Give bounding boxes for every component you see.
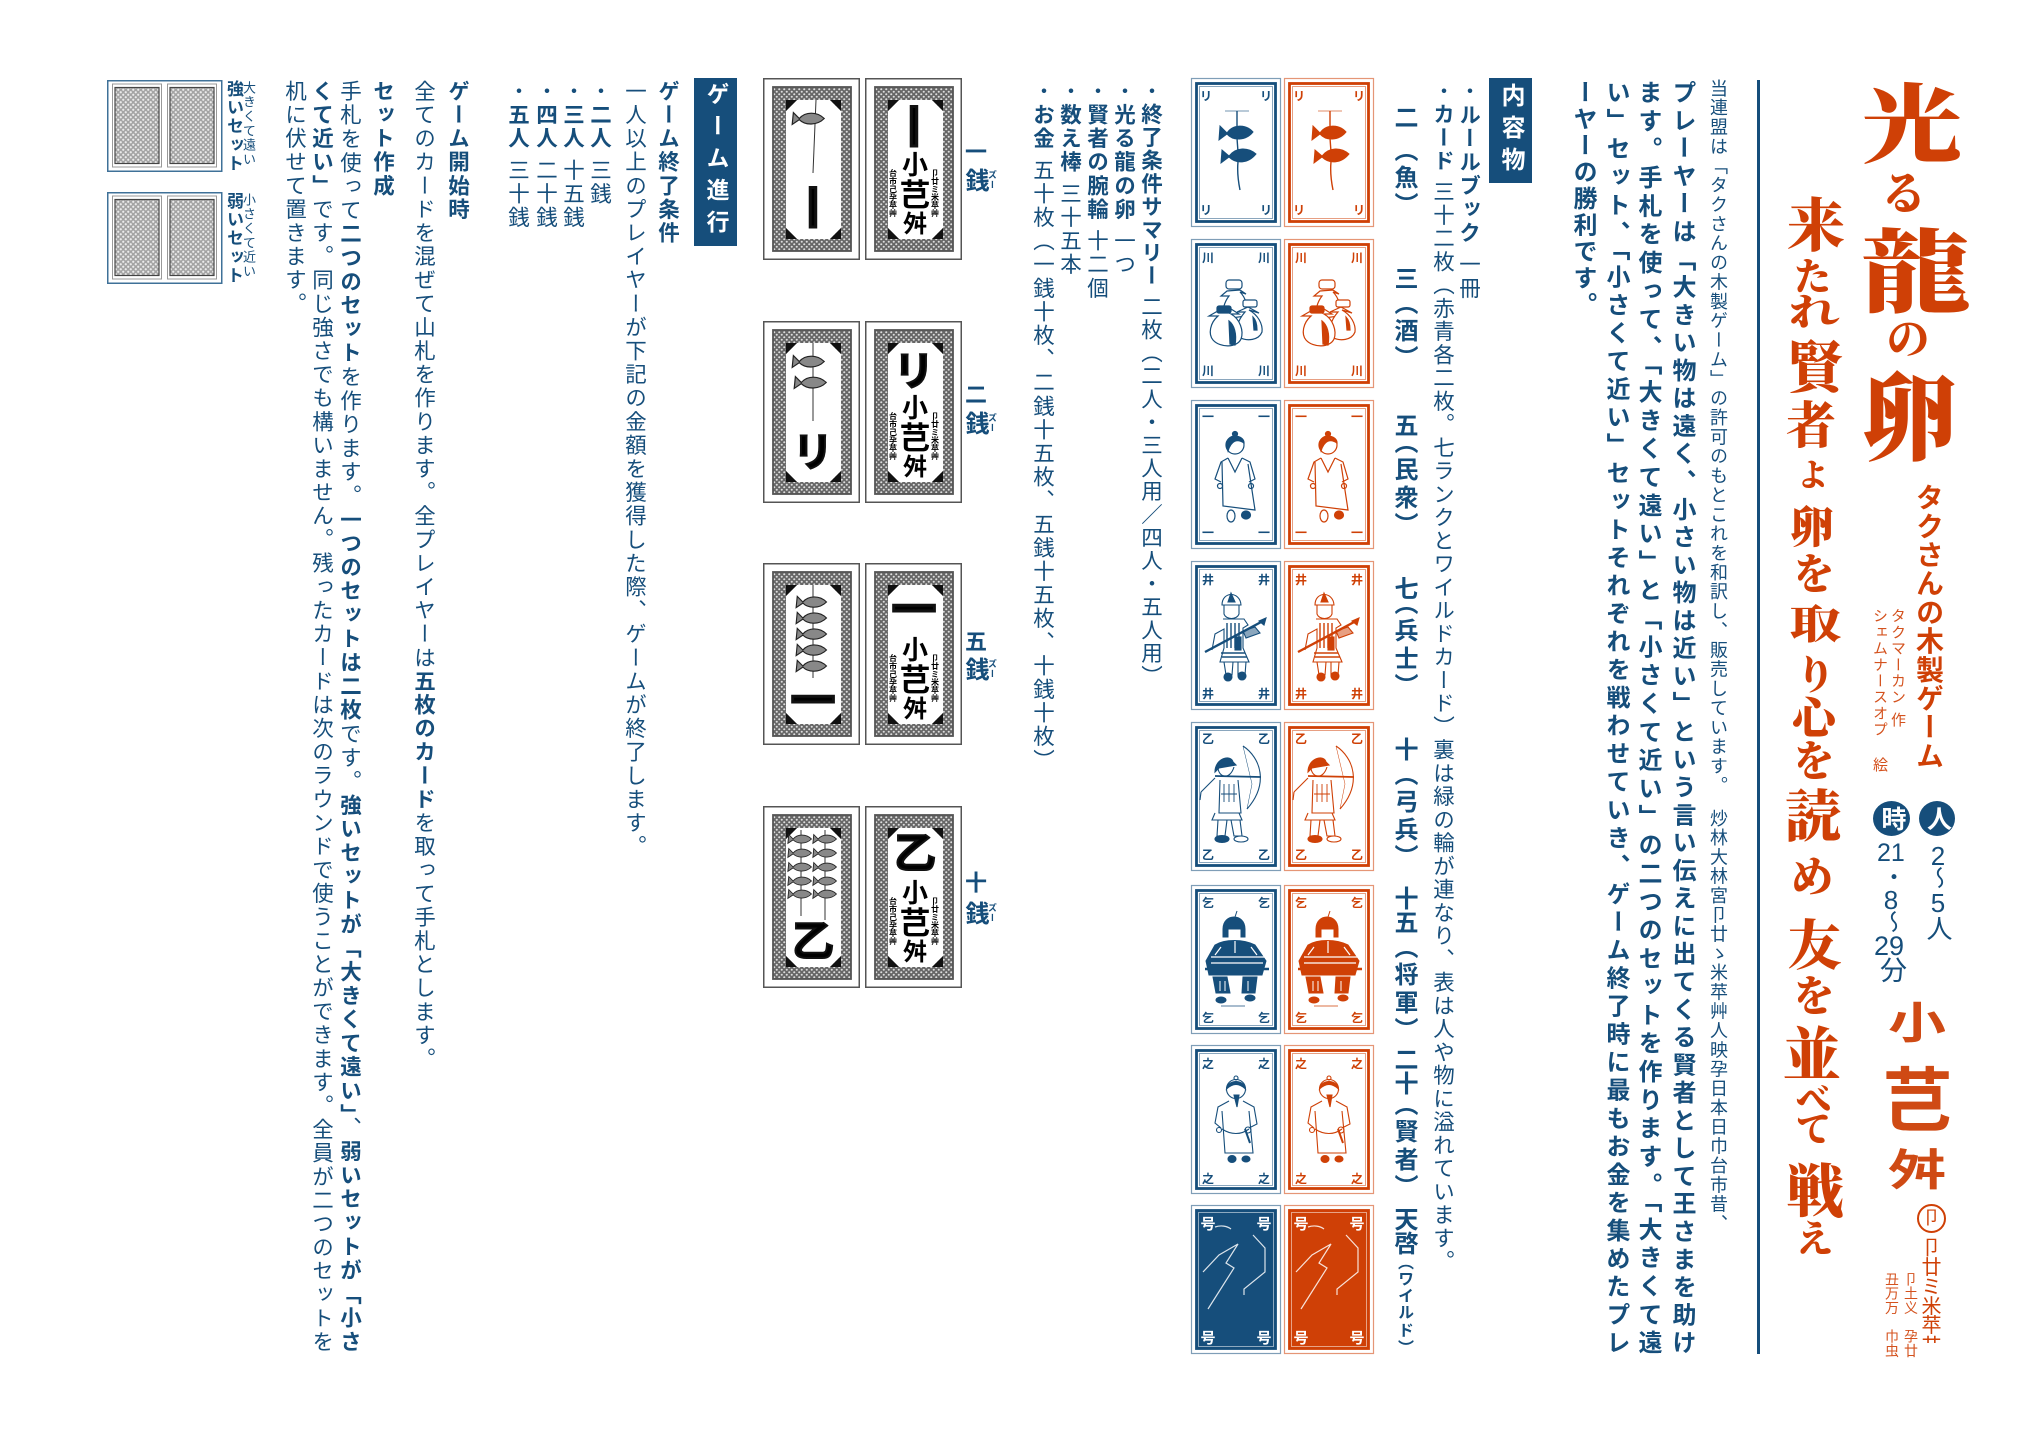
title: 光る龍の卵 (1837, 80, 1995, 464)
card: red wine three: 川 (1295, 364, 1307, 378)
coin ten label: 十 (962, 871, 987, 893)
publisher logo: 舛 (1879, 1147, 1944, 1191)
coin two back: 卩廿ミ米苹艸 (930, 412, 940, 461)
tagline: 来たれ賢者よ 卵を取り心を読め 友を並べて戦え: 戦 (1773, 1161, 1857, 1219)
coin one back: 卩廿ミ米苹艸 (930, 169, 940, 218)
tagline: 来たれ賢者よ 卵を取り心を読め 友を並べて戦え: を (1784, 974, 1844, 1016)
card: red wild tenkei: 号 (1349, 1216, 1365, 1233)
set creation (281, 80, 395, 1354)
licence note: 当連盟は「タクさんの木製ゲーム」の許可のもとこれを和訳し、販売しています。 (1708, 79, 1728, 794)
tagline: 来たれ賢者よ 卵を取り心を読め 友を並べて戦え: め (1780, 854, 1844, 898)
card: red commoner five (1284, 400, 1374, 550)
set creation: 手札を使って 二つのセット を作ります。 一つのセットは二枚 です。 強いセットが「大きくて遠い」 、 弱いセットが「小さ (338, 80, 362, 1352)
coin one label: ズー (987, 170, 997, 190)
icon: players badge and count: 5 (1923, 888, 1953, 918)
tagline: 来たれ賢者よ 卵を取り心を読め 友を並べて戦え: 並 (1770, 1024, 1854, 1082)
tagline: 来たれ賢者よ 卵を取り心を読め 友を並べて戦え: を (1784, 739, 1844, 781)
weak set example: 小さくて近い (241, 193, 256, 279)
card rank labels: 三 （酒） (1390, 266, 1417, 362)
set creation: くて近い」 です。同じ強さでも構いません。残ったカードは次のラウンドで使うことができます。全員が二つのセットを (310, 80, 334, 1352)
card: red general fifteen (1284, 884, 1374, 1034)
card: blue archer ten: 乙 (1258, 732, 1270, 746)
card: red commoner five: 一 (1295, 526, 1307, 540)
title: 光る龍の卵: 卵 (1841, 368, 1978, 464)
coin five label: 銭 (961, 657, 988, 681)
icon: players badge and count: 人 (1924, 806, 1952, 831)
coin five back: 小 (902, 635, 928, 665)
card: blue commoner five: 一 (1258, 526, 1270, 540)
card rank labels: 十 （弓兵） (1390, 737, 1417, 861)
component list: ・ 数え棒 三十五本 (1058, 80, 1082, 277)
component list: ・ 終了条件サマリー 二枚（二人・三人用／四人・五人用） (1138, 80, 1162, 688)
card: red wine three: 川 (1351, 364, 1363, 378)
coin one back: 台市己孕苹艸 (888, 168, 898, 218)
card: red wild tenkei (1284, 1204, 1374, 1354)
component list (1030, 80, 1162, 772)
publisher logo: 小 (1879, 1000, 1944, 1044)
publisher mark and address in pseudo script (1884, 1204, 1946, 1358)
card: red wine three (1284, 238, 1374, 388)
component list: ・ 光る龍の卵 一つ (1112, 80, 1136, 277)
intro paragraph: ーヤーの勝利です。 (1569, 80, 1596, 318)
card: red sage twenty: 之 (1295, 1171, 1307, 1186)
card: blue soldier seven: 井 (1202, 686, 1214, 701)
card: blue sage twenty: 之 (1202, 1171, 1214, 1186)
coin five label: ズー (987, 659, 997, 679)
card: blue general fifteen (1190, 884, 1282, 1034)
coin ten front: 乙 (792, 918, 834, 965)
coin ten back (865, 806, 962, 988)
credits: designer and artist: シェムナースオプ (1871, 608, 1888, 738)
publisher logo (1873, 1000, 1951, 1191)
card: blue wild tenkei (1190, 1204, 1282, 1354)
coin ten label: 銭 (961, 901, 988, 925)
card: blue wild tenkei: 号 (1200, 1330, 1216, 1347)
tagline: 来たれ賢者よ 卵を取り心を読め 友を並べて戦え: を (1784, 552, 1844, 594)
coin one back: 小 (902, 150, 928, 180)
card: red archer ten: 乙 (1351, 848, 1363, 862)
card rank labels: 天啓 （ワイルド） (1390, 1207, 1417, 1350)
tagline: 来たれ賢者よ 卵を取り心を読め 友を並べて戦え: 卵 (1780, 504, 1844, 548)
card: blue archer ten: 乙 (1258, 848, 1270, 862)
icon: players badge and count: 人 (1923, 915, 1953, 941)
card: blue wine three: 川 (1202, 364, 1214, 378)
card: blue soldier seven: 井 (1202, 572, 1214, 587)
coin ten back: 舛 (903, 939, 927, 966)
set creation: 机に伏せて置きます。 (282, 80, 306, 316)
tagline: 来たれ賢者よ 卵を取り心を読め 友を並べて戦え: 来 (1774, 195, 1858, 253)
game end conditions: 一人以上のプレイヤーが下記の金額を獲得した際、ゲームが終了します。 (622, 80, 646, 859)
coin two back: 台市己孕苹艸 (888, 411, 898, 461)
icon: time badge and duration: 21 (1877, 839, 1905, 867)
heading: ゲーム進行 (694, 78, 737, 246)
icon: time badge and duration (1873, 801, 1910, 983)
card: blue fish two: リ (1200, 203, 1212, 217)
coin one front (763, 78, 860, 260)
tagline: 来たれ賢者よ 卵を取り心を読め 友を並べて戦え: て (1788, 1110, 1839, 1146)
game start (410, 80, 470, 1060)
intro paragraph (1569, 80, 1696, 1354)
strong set example: 強いセット (224, 80, 243, 173)
strong set example: 大きくて遠い (241, 81, 256, 167)
card: red wild tenkei: 号 (1349, 1330, 1365, 1347)
icon: time badge and duration: ・ (1879, 865, 1905, 888)
coin one back: 舛 (903, 211, 927, 238)
licence note (1708, 79, 1728, 1232)
set creation: セット作成 (370, 80, 394, 198)
weak set example (107, 192, 257, 285)
coin one label: 銭 (961, 168, 988, 192)
card: blue general fifteen: 乞 (1202, 1010, 1214, 1025)
card: blue soldier seven: 井 (1258, 572, 1270, 587)
contents list: rulebook and cards (1430, 80, 1480, 1273)
coin one back (865, 78, 962, 260)
game end conditions: ・ 三人 十五銭 (560, 80, 584, 230)
coin two back (865, 321, 962, 503)
publisher mark and address in pseudo script: 丑万万 巾虫 (1884, 1272, 1900, 1358)
card: red archer ten (1284, 722, 1374, 872)
card: blue archer ten: 乙 (1202, 848, 1214, 862)
card: blue archer ten (1190, 722, 1282, 872)
coin five back: 芑 (900, 663, 930, 698)
coin one back: 芑 (900, 178, 930, 213)
coin ten back: 卩廿ミ米苹艸 (930, 897, 940, 946)
card: blue fish two: リ (1200, 89, 1212, 103)
icon: players badge and count: ～ (1925, 866, 1951, 889)
icon: time badge and duration: 8 (1876, 885, 1906, 915)
game end conditions: ・ 四人 二十銭 (534, 80, 558, 230)
coin ten back: 小 (902, 878, 928, 908)
panel: rank card grid (1190, 78, 1374, 1354)
card: red general fifteen: 乞 (1351, 895, 1363, 910)
card: blue general fifteen: 乞 (1258, 895, 1270, 910)
intro paragraph: ます。手札を使って、「大きくて遠い」と「小さくて近い」の二つのセットを作ります。「大きくて遠 (1634, 80, 1661, 1354)
card: blue fish two (1190, 78, 1282, 228)
coin ten back: 乙 (894, 830, 936, 877)
coin five back: 台市己孕苹艸 (888, 653, 898, 703)
card: blue sage twenty: 之 (1202, 1056, 1214, 1071)
coin one label: 一 (962, 140, 987, 162)
game end conditions: ゲーム終了条件 (656, 80, 680, 245)
card: red general fifteen: 乞 (1295, 895, 1307, 910)
card: blue general fifteen: 乞 (1202, 895, 1214, 910)
card: red sage twenty: 之 (1351, 1171, 1363, 1186)
card: blue wine three: 川 (1202, 251, 1214, 265)
card: red soldier seven (1284, 560, 1374, 710)
credits: designer and artist (1871, 608, 1906, 772)
card: red soldier seven: 井 (1295, 572, 1307, 587)
card: red general fifteen: 乞 (1295, 1010, 1307, 1025)
card: red archer ten: 乙 (1351, 732, 1363, 746)
tagline: 来たれ賢者よ 卵を取り心を読め 友を並べて戦え: 友 (1776, 917, 1853, 971)
coin five back: 舛 (903, 696, 927, 723)
intro paragraph: プレーヤーは「大きい物は遠く、小さい物は近い」という言い伝えに出てくる賢者として王さまを助け (1668, 80, 1695, 1354)
heading: 内容物: 内容物 (1497, 82, 1524, 178)
card rank labels (1390, 105, 1418, 1350)
component list: ・ お金 五十枚（一銭十枚、二銭十五枚、五銭十五枚、十銭十枚） (1030, 80, 1054, 772)
card: red fish two (1284, 78, 1374, 228)
coin five label: 五 (962, 630, 987, 652)
card: blue sage twenty: 之 (1258, 1056, 1270, 1071)
card: red wine three: 川 (1295, 251, 1307, 265)
coin one back: 丨 (893, 104, 935, 151)
card: red sage twenty (1284, 1044, 1374, 1194)
publisher mark and address in pseudo script: 卩土义 孕廿 (1903, 1272, 1919, 1358)
title: 光る龍の卵: 光 (1840, 80, 1984, 166)
game start: 全てのカードを混ぜて山札を作ります。全プレイヤーは 五枚のカード を取って手札とします。 (412, 80, 436, 1071)
coin five front (763, 563, 860, 745)
coin two label: ズー (987, 413, 997, 433)
card rank labels: 七 （兵士） (1390, 576, 1417, 690)
card rank labels: 二十 （賢者） (1390, 1047, 1417, 1191)
card: red archer ten: 乙 (1295, 732, 1307, 746)
card: blue archer ten: 乙 (1202, 732, 1214, 746)
title: 光る龍の卵: る (1871, 169, 1937, 215)
tagline: 来たれ賢者よ 卵を取り心を読め 友を並べて戦え: べ (1788, 1080, 1839, 1116)
tagline: 来たれ賢者よ 卵を取り心を読め 友を並べて戦え: た (1785, 257, 1840, 295)
card: blue wine three: 川 (1258, 364, 1270, 378)
weak set example: 弱いセット (224, 192, 243, 285)
icon: time badge and duration: ～ (1879, 910, 1905, 933)
coin five back: 卩廿ミ米苹艸 (930, 654, 940, 703)
coin two back: 小 (902, 393, 928, 423)
intro paragraph: い」セット、「小さくて近い」セットそれぞれを戦わせていき、ゲーム終了時に最もお金を集めたプレ (1602, 80, 1629, 1354)
card: blue wild tenkei: 号 (1256, 1330, 1272, 1347)
card: red sage twenty: 之 (1295, 1056, 1307, 1071)
tagline: 来たれ賢者よ 卵を取り心を読め 友を並べて戦え: よ (1790, 458, 1836, 490)
card: red archer ten: 乙 (1295, 848, 1307, 862)
coin five back (865, 563, 962, 745)
icon: time badge and duration: 分 (1876, 956, 1906, 983)
coin one front: 丨 (792, 185, 834, 232)
card: red soldier seven: 井 (1351, 686, 1363, 701)
card: blue commoner five: 一 (1202, 410, 1214, 424)
coin ten label: ズー (987, 903, 997, 923)
card: red fish two: リ (1353, 203, 1365, 217)
tagline: 来たれ賢者よ 卵を取り心を読め 友を並べて戦え: 取 (1778, 603, 1853, 643)
tagline: 来たれ賢者よ 卵を取り心を読め 友を並べて戦え: 賢 (1775, 338, 1855, 394)
card: blue commoner five: 一 (1258, 410, 1270, 424)
coin one label (961, 140, 997, 192)
coin five label (961, 630, 997, 681)
coin ten back: 台市己孕苹艸 (888, 896, 898, 946)
card: red fish two: リ (1353, 89, 1365, 103)
card: blue wild tenkei: 号 (1200, 1216, 1216, 1233)
game end conditions (504, 80, 682, 850)
tagline: 来たれ賢者よ 卵を取り心を読め 友を並べて戦え: り (1787, 654, 1844, 694)
coin five front: 一 (791, 677, 835, 726)
card rank labels: 二 （魚） (1390, 105, 1417, 209)
game end conditions: ・ 二人 三銭 (588, 80, 612, 206)
game end conditions: ・ 五人 三十銭 (506, 80, 530, 230)
card: blue general fifteen: 乞 (1258, 1010, 1270, 1025)
card: red general fifteen: 乞 (1351, 1010, 1363, 1025)
coin two back: 舛 (903, 454, 927, 481)
card: blue wild tenkei: 号 (1256, 1216, 1272, 1233)
card: red soldier seven: 井 (1295, 686, 1307, 701)
card: blue commoner five: 一 (1202, 526, 1214, 540)
contents list: rulebook and cards: ・ ルールブック 一冊 (1456, 80, 1480, 300)
coin ten back: 芑 (900, 906, 930, 941)
coin two front (763, 321, 860, 503)
card: red wine three: 川 (1351, 251, 1363, 265)
title: 光る龍の卵: の (1876, 316, 1940, 360)
tagline: 来たれ賢者よ 卵を取り心を読め 友を並べて戦え (1770, 195, 1858, 1257)
heading: ゲーム進行: ゲーム進行 (703, 82, 729, 242)
publisher mark and address in pseudo script: 卩 (1922, 1208, 1940, 1228)
coin two back: リ (894, 350, 934, 394)
strong set example (107, 80, 257, 173)
title: 光る龍の卵: 龍 (1837, 225, 1995, 315)
card: red wild tenkei: 号 (1293, 1216, 1309, 1233)
panel: coin cards (763, 78, 997, 988)
publisher mark and address in pseudo script: 卩廿ミ米苹艹 (1918, 1237, 1940, 1353)
icon: time badge and duration: 29 (1874, 931, 1904, 961)
card: blue soldier seven (1190, 560, 1282, 710)
tagline: 来たれ賢者よ 卵を取り心を読め 友を並べて戦え: 心 (1782, 695, 1846, 739)
game start: ゲーム開始時 (446, 80, 470, 222)
card: blue commoner five (1190, 400, 1282, 550)
credits: designer and artist: 絵 (1871, 757, 1888, 772)
card: blue fish two: リ (1260, 203, 1272, 217)
coin two front: リ (793, 431, 833, 475)
card: red fish two: リ (1293, 203, 1305, 217)
card: red commoner five: 一 (1351, 526, 1363, 540)
card: red fish two: リ (1293, 89, 1305, 103)
card rank labels: 十五 （将軍） (1390, 886, 1417, 1034)
card: red wild tenkei: 号 (1293, 1330, 1309, 1347)
card: red commoner five: 一 (1295, 410, 1307, 424)
icon: players badge and count: 2 (1923, 841, 1953, 871)
component list: ・ 賢者の腕輪 十二個 (1084, 80, 1108, 300)
credits: designer and artist: 作 (1889, 712, 1906, 727)
card: blue wine three (1190, 238, 1282, 388)
tagline: 来たれ賢者よ 卵を取り心を読め 友を並べて戦え: れ (1777, 293, 1852, 329)
card: red sage twenty: 之 (1351, 1056, 1363, 1071)
coin two label: 銭 (961, 411, 988, 435)
card: blue sage twenty (1190, 1044, 1282, 1194)
coin ten label (962, 871, 994, 927)
card: red soldier seven: 井 (1351, 572, 1363, 587)
card: blue sage twenty: 之 (1258, 1171, 1270, 1186)
coin two back: 芑 (900, 421, 930, 456)
card: blue wine three: 川 (1258, 251, 1270, 265)
licence note: 炒林大林宮卩廿ゝ米苹艸人映孕日本日巾台市昔、 (1708, 809, 1728, 1232)
subtitle: タクさんの木製ゲーム: タクさんの木製ゲーム (1913, 483, 1944, 770)
coin two label (961, 383, 997, 435)
coin two label: 二 (962, 383, 987, 405)
coin ten front (763, 806, 860, 988)
icon: players badge and count (1919, 801, 1955, 941)
credits: designer and artist: タクマーカン (1889, 608, 1906, 705)
tagline: 来たれ賢者よ 卵を取り心を読め 友を並べて戦え: 読 (1773, 787, 1853, 843)
tagline: 来たれ賢者よ 卵を取り心を読め 友を並べて戦え: 者 (1775, 399, 1847, 449)
card: blue fish two: リ (1260, 89, 1272, 103)
card: blue soldier seven: 井 (1258, 686, 1270, 701)
publisher logo: 芑 (1873, 1064, 1951, 1134)
heading: 内容物 (1489, 78, 1532, 183)
vertical divider line (1757, 80, 1760, 1354)
card: red commoner five: 一 (1351, 410, 1363, 424)
coin five back: 一 (892, 586, 936, 635)
tagline: 来たれ賢者よ 卵を取り心を読め 友を並べて戦え: え (1787, 1219, 1842, 1257)
contents list: rulebook and cards: ・ カード 三十二枚（赤青各二枚。七ランクとワイルドカード）裏は緑の輪が連なり、表は人や物に溢れています。 (1430, 80, 1454, 1273)
icon: time badge and duration: 時 (1878, 806, 1906, 831)
card rank labels: 五 （民衆） (1390, 413, 1417, 529)
